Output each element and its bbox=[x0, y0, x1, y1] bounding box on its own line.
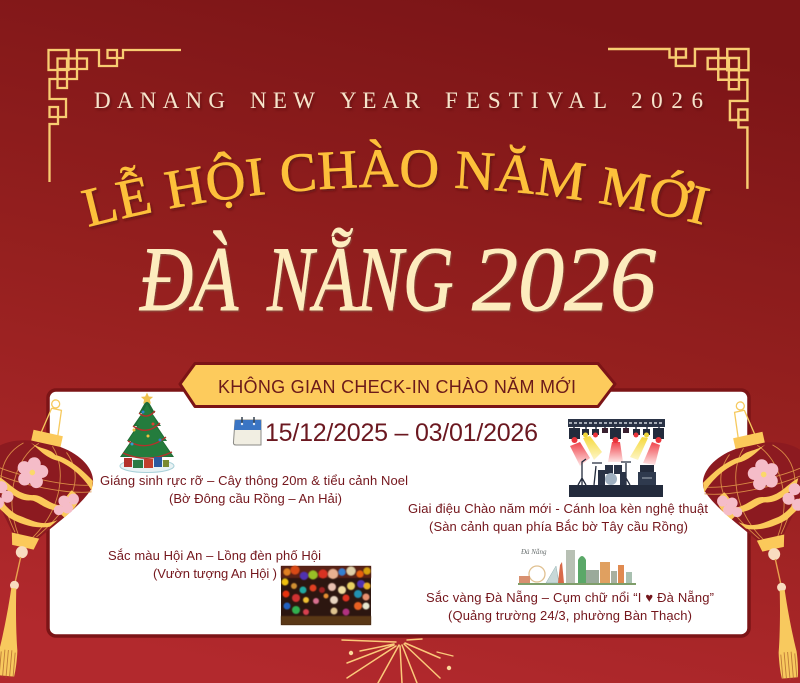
subtitle: YEAR bbox=[340, 88, 421, 113]
subtitle: DANANG bbox=[94, 88, 225, 113]
text: Hoi An lanterns location: Sắc màu Hội An – Lồng đèn phố Hội bbox=[108, 548, 321, 563]
icon: calendar bbox=[233, 417, 261, 445]
text: Hoi An lanterns location: (Vườn tượng An Hội ) bbox=[153, 566, 277, 581]
text: Christmas tree location bbox=[100, 473, 408, 506]
subtitle: FESTIVAL bbox=[445, 88, 607, 113]
fireworks bbox=[342, 639, 453, 683]
title: Da Nang 2026 bbox=[139, 228, 656, 331]
lantern: left bbox=[0, 388, 109, 683]
title: Da Nang 2026: NẴNG bbox=[266, 228, 453, 330]
corner ornament: top left bbox=[48, 50, 181, 182]
text: Christmas tree location: (Bờ Đông cầu Rồng – An Hải) bbox=[169, 491, 342, 506]
date: 15/12/2025 – 03/01/2026 bbox=[265, 419, 538, 447]
illustration: Da Nang skyline: Đà Nẵng bbox=[520, 548, 547, 556]
subtitle: NEW bbox=[250, 88, 315, 113]
text: New Year melody location: Giai điệu Chào năm mới - Cánh loa kèn nghệ thuật bbox=[408, 501, 708, 516]
text: New Year melody location: (Sàn cảnh quan phía Bắc bờ Tây cầu Rồng) bbox=[429, 519, 688, 534]
photo: Hoi An lanterns bbox=[281, 566, 371, 625]
text: Hoi An lanterns location bbox=[108, 548, 321, 581]
subtitle bbox=[94, 88, 703, 113]
icon: christmas tree bbox=[120, 392, 174, 472]
panel: check-in spaces bbox=[48, 390, 749, 636]
corner ornament: top right bbox=[608, 49, 748, 189]
text: New Year melody location bbox=[408, 501, 708, 534]
text: golden Da Nang location: (Quảng trường 24/3, phường Bàn Thạch) bbox=[448, 608, 692, 623]
subtitle: 2026 bbox=[631, 88, 703, 113]
title: Da Nang 2026: 2026 bbox=[472, 228, 656, 330]
text: Christmas tree location: Giáng sinh rực rỡ – Cây thông 20m & tiểu cảnh Noel bbox=[100, 473, 408, 488]
banner bbox=[180, 364, 615, 406]
title: arched heading: LỄ HỘI CHÀO NĂM MỚI bbox=[80, 139, 712, 230]
lantern: right bbox=[687, 390, 800, 683]
banner text: KHÔNG GIAN CHECK-IN CHÀO NĂM MỚI bbox=[218, 376, 576, 397]
text: golden Da Nang location: Sắc vàng Đà Nẵng – Cụm chữ nổi “I ♥ Đà Nẵng” bbox=[426, 590, 714, 605]
illustration: Da Nang skyline bbox=[518, 548, 636, 585]
text: golden Da Nang location bbox=[426, 590, 714, 623]
icon: stage bbox=[568, 419, 665, 497]
title: Da Nang 2026: ĐÀ bbox=[139, 229, 239, 331]
